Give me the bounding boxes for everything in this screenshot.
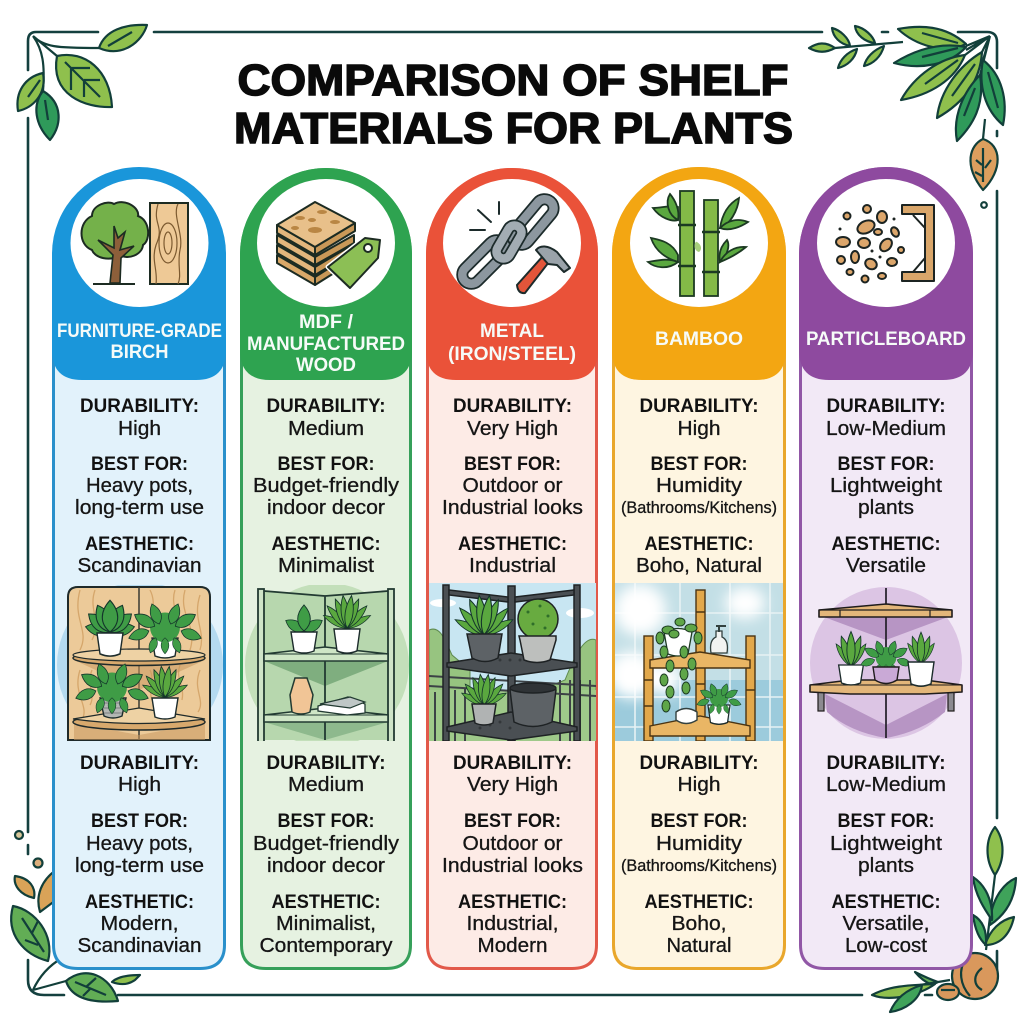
lower specs: AESTHETIC: — [458, 892, 567, 913]
shelf illustration: bamboo bathroom shelf — [608, 583, 783, 741]
upper specs: Very High — [467, 418, 558, 440]
upper specs: AESTHETIC: — [644, 534, 754, 555]
upper specs — [621, 396, 777, 577]
lower specs: AESTHETIC: — [832, 892, 940, 913]
upper specs: Minimalist — [278, 555, 374, 577]
top-left corner leaves — [17, 25, 147, 140]
upper specs: Boho, Natural — [636, 555, 762, 577]
lower specs: Lightweight — [830, 833, 942, 855]
lower specs: DURABILITY: — [80, 753, 199, 774]
card body — [614, 169, 784, 969]
title: COMPARISON OF SHELF — [238, 57, 788, 105]
panel: MDF / manufactured wood — [240, 168, 412, 968]
shelf illustration: MDF shelving — [245, 583, 409, 747]
card body — [242, 170, 410, 969]
lower specs: plants — [858, 855, 914, 877]
icon: chain and hammer — [443, 179, 581, 307]
upper specs: Heavy pots, — [86, 475, 193, 497]
lower specs: Minimalist, — [276, 913, 376, 935]
lower specs: BEST FOR: — [838, 811, 934, 832]
upper specs: DURABILITY: — [453, 396, 572, 417]
lower specs — [826, 753, 946, 957]
lower specs: Natural — [666, 935, 732, 957]
lower specs: Boho, — [672, 913, 726, 935]
lower specs: High — [118, 774, 161, 796]
card body — [428, 170, 596, 969]
lower specs: High — [678, 774, 720, 796]
lower specs: Contemporary — [260, 935, 392, 957]
material name: METAL — [480, 320, 544, 342]
material name: FURNITURE-GRADE — [57, 320, 222, 342]
lower specs: Scandinavian — [78, 935, 202, 957]
card body — [54, 177, 224, 968]
top-right corner leaves — [809, 26, 1005, 208]
upper specs: (Bathrooms/Kitchens) — [621, 498, 777, 517]
material name: BIRCH — [110, 341, 168, 363]
panel: metal (iron/steel) — [426, 168, 598, 968]
icon: wood particles and bracket — [817, 179, 955, 307]
lower specs: Very High — [467, 774, 558, 796]
lower specs: indoor decor — [267, 855, 385, 877]
upper specs: Versatile — [846, 555, 926, 577]
lower specs: DURABILITY: — [640, 753, 758, 774]
upper specs: Industrial looks — [442, 497, 583, 519]
card body — [800, 169, 972, 969]
header band — [240, 168, 412, 380]
header band — [426, 168, 598, 380]
upper specs — [826, 396, 946, 577]
upper specs — [253, 396, 399, 577]
upper specs: DURABILITY: — [826, 396, 946, 417]
panel: particleboard — [799, 167, 973, 968]
lower specs: long-term use — [75, 855, 204, 877]
material name: MANUFACTURED — [247, 333, 405, 355]
lower specs: Industrial, — [466, 913, 558, 935]
panel: bamboo — [608, 167, 786, 968]
upper specs: plants — [858, 497, 914, 519]
upper specs: Budget-friendly — [253, 475, 399, 497]
upper specs: DURABILITY: — [266, 396, 386, 417]
icon: tree and wood plank — [70, 179, 208, 307]
upper specs: BEST FOR: — [838, 454, 934, 475]
upper specs: AESTHETIC: — [458, 534, 567, 555]
lower specs: BEST FOR: — [91, 811, 188, 832]
shelf illustration: birch corner shelf — [57, 582, 223, 748]
upper specs: Humidity — [656, 475, 742, 497]
upper specs: Low-Medium — [826, 418, 946, 440]
lower specs: Low-cost — [845, 935, 927, 957]
lower specs: Heavy pots, — [86, 833, 193, 855]
panel: furniture-grade birch — [52, 167, 226, 968]
lower specs: DURABILITY: — [453, 753, 572, 774]
upper specs: High — [678, 418, 720, 440]
lower specs: AESTHETIC: — [644, 892, 754, 913]
upper specs — [75, 396, 204, 577]
upper specs: BEST FOR: — [91, 454, 188, 475]
lower specs — [442, 753, 583, 957]
bottom-left corner leaves — [11, 831, 140, 1002]
lower specs — [75, 753, 204, 957]
lower specs: Medium — [288, 774, 364, 796]
lower specs: Humidity — [656, 833, 742, 855]
lower specs: Versatile, — [842, 913, 930, 935]
header band — [52, 167, 226, 380]
upper specs: Scandinavian — [78, 555, 202, 577]
upper specs: AESTHETIC: — [272, 534, 380, 555]
upper specs: BEST FOR: — [650, 454, 748, 475]
upper specs: Industrial — [469, 555, 556, 577]
material name: BAMBOO — [655, 328, 743, 350]
header band — [612, 167, 786, 380]
lower specs: Modern, — [100, 913, 178, 935]
lower specs: Modern — [478, 935, 548, 957]
title: MATERIALS FOR PLANTS — [234, 105, 793, 153]
upper specs: Outdoor or — [462, 475, 563, 497]
material name: PARTICLEBOARD — [806, 328, 966, 350]
lower specs: DURABILITY: — [266, 753, 386, 774]
lower specs: Low-Medium — [826, 774, 946, 796]
upper specs: Medium — [288, 418, 364, 440]
upper specs: AESTHETIC: — [85, 534, 194, 555]
lower specs: BEST FOR: — [650, 811, 748, 832]
lower specs: AESTHETIC: — [85, 892, 194, 913]
lower specs — [253, 753, 399, 957]
material name: MDF / — [299, 311, 354, 333]
title — [234, 57, 793, 153]
upper specs: High — [118, 418, 161, 440]
lower specs: Budget-friendly — [253, 833, 399, 855]
lower specs: Industrial looks — [442, 855, 583, 877]
material name: (IRON/STEEL) — [448, 343, 576, 365]
upper specs: indoor decor — [267, 497, 385, 519]
icon: bamboo stalks — [630, 179, 768, 307]
lower specs: (Bathrooms/Kitchens) — [621, 856, 777, 875]
header band — [799, 167, 973, 380]
upper specs: BEST FOR: — [278, 454, 374, 475]
lower specs: AESTHETIC: — [272, 892, 380, 913]
lower specs: DURABILITY: — [826, 753, 946, 774]
material name — [57, 320, 222, 363]
material name — [247, 311, 405, 376]
material name — [448, 320, 576, 365]
material name: WOOD — [296, 354, 356, 376]
upper specs: DURABILITY: — [640, 396, 758, 417]
lower specs — [621, 753, 777, 957]
lower specs: BEST FOR: — [464, 811, 561, 832]
lower specs: BEST FOR: — [278, 811, 374, 832]
upper specs: DURABILITY: — [80, 396, 199, 417]
icon: board stack and price tag — [257, 179, 395, 307]
upper specs: AESTHETIC: — [832, 534, 940, 555]
bottom-right corner leaves and nuts — [872, 827, 1016, 1012]
upper specs: BEST FOR: — [464, 454, 561, 475]
upper specs — [442, 396, 583, 577]
shelf illustration: metal balcony shelf — [429, 583, 596, 741]
lower specs: Outdoor or — [462, 833, 563, 855]
shelf illustration: particleboard corner shelves — [810, 587, 962, 739]
upper specs: Lightweight — [830, 475, 942, 497]
upper specs: long-term use — [75, 497, 204, 519]
